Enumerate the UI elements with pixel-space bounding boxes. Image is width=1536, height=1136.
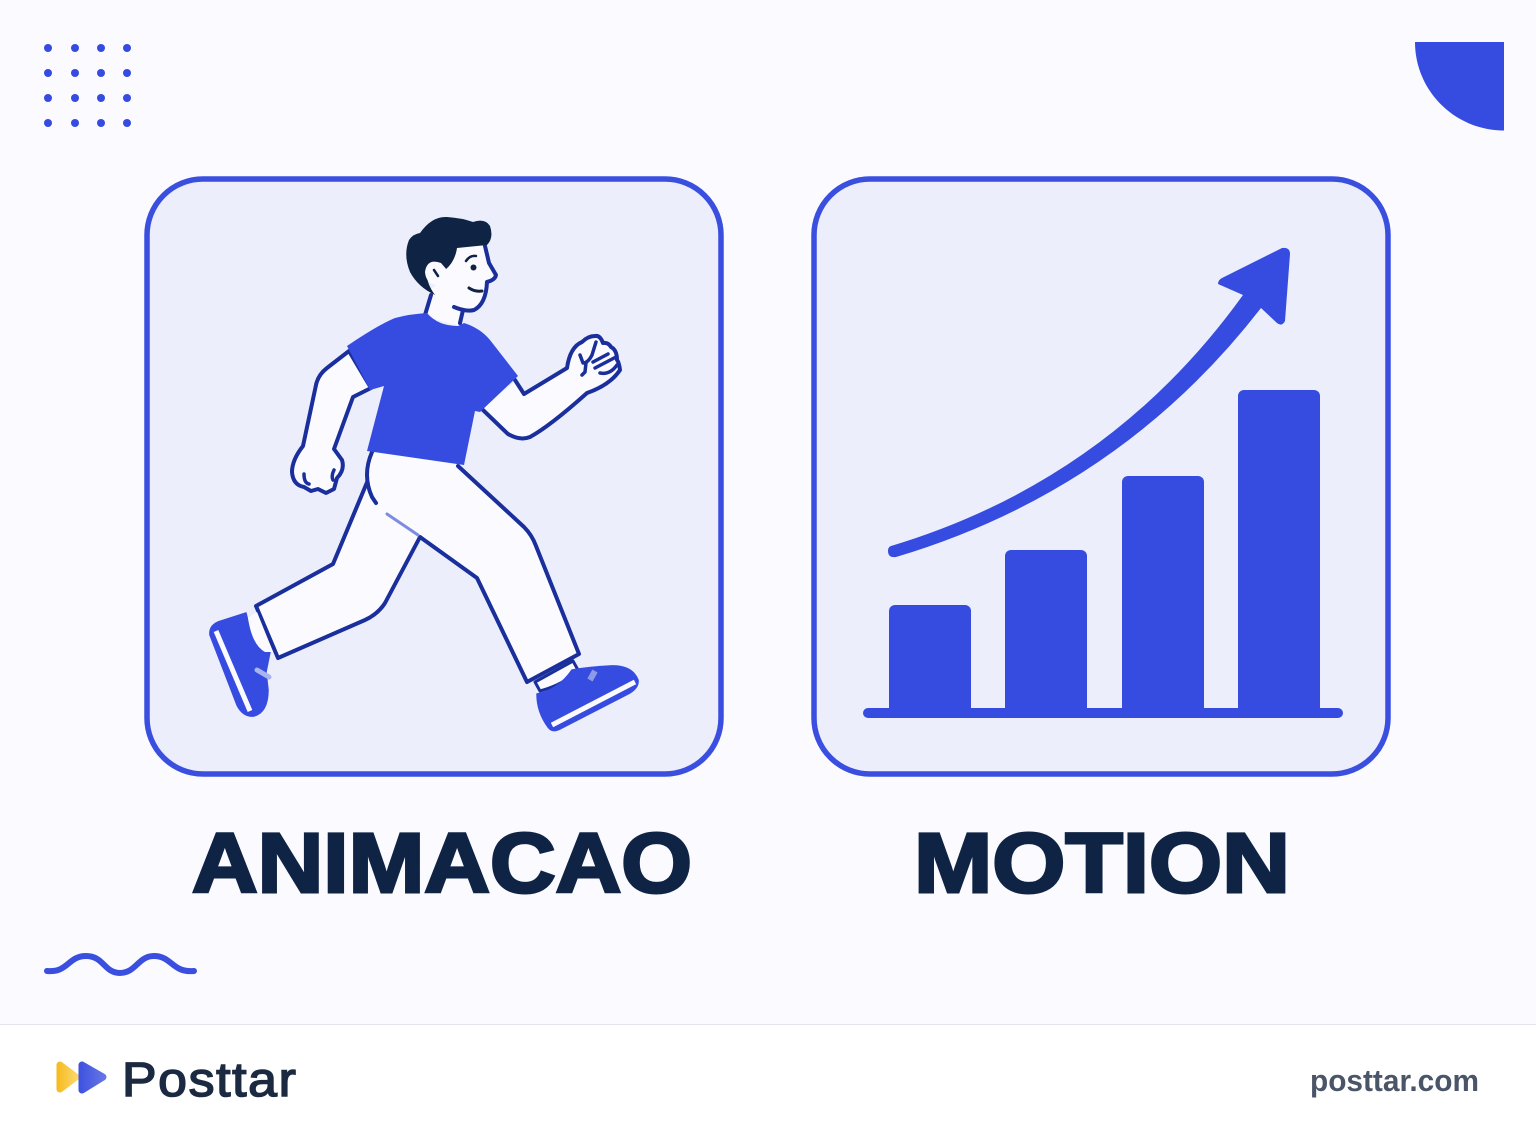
t-shirt [347, 313, 518, 465]
decorative wave [47, 956, 194, 973]
panel: animacao card [147, 179, 721, 774]
faded crease [387, 514, 418, 535]
eyebrow [466, 256, 476, 261]
panel: motion card [814, 179, 1388, 774]
decorative dot grid [44, 44, 131, 127]
back arm finger [304, 470, 334, 484]
eye [470, 264, 476, 270]
face outline [425, 246, 496, 323]
hair [406, 217, 491, 295]
front shoe sole [552, 682, 635, 725]
back shoe sole [216, 631, 250, 711]
fingers [580, 342, 617, 375]
footer [0, 1024, 1536, 1136]
back arm [292, 351, 371, 493]
illustration: running man [210, 217, 638, 731]
back sock [248, 612, 273, 652]
front arm [480, 339, 620, 439]
ear line [434, 270, 438, 276]
back shoe [210, 613, 270, 716]
decorative quarter circle [1415, 42, 1504, 130]
heading: animacao: ANIMACAO [192, 816, 692, 910]
back shoe mark [257, 670, 269, 677]
ear [425, 262, 447, 285]
website url: posttar.com [1310, 1063, 1479, 1098]
front shoe mark [590, 671, 595, 680]
logo wordmark: Posttar [122, 1053, 298, 1107]
front leg [367, 452, 579, 682]
back leg [256, 480, 420, 658]
growth arrow [888, 248, 1290, 557]
mouth [469, 288, 482, 291]
front leg outline [367, 452, 579, 682]
front shoe [537, 666, 638, 731]
front arm outline [483, 336, 620, 438]
bar chart [863, 390, 1343, 718]
logo icon [60, 1065, 103, 1090]
front sock [535, 661, 578, 691]
heading: motion: MOTION [914, 816, 1290, 910]
neck and face [425, 244, 495, 326]
